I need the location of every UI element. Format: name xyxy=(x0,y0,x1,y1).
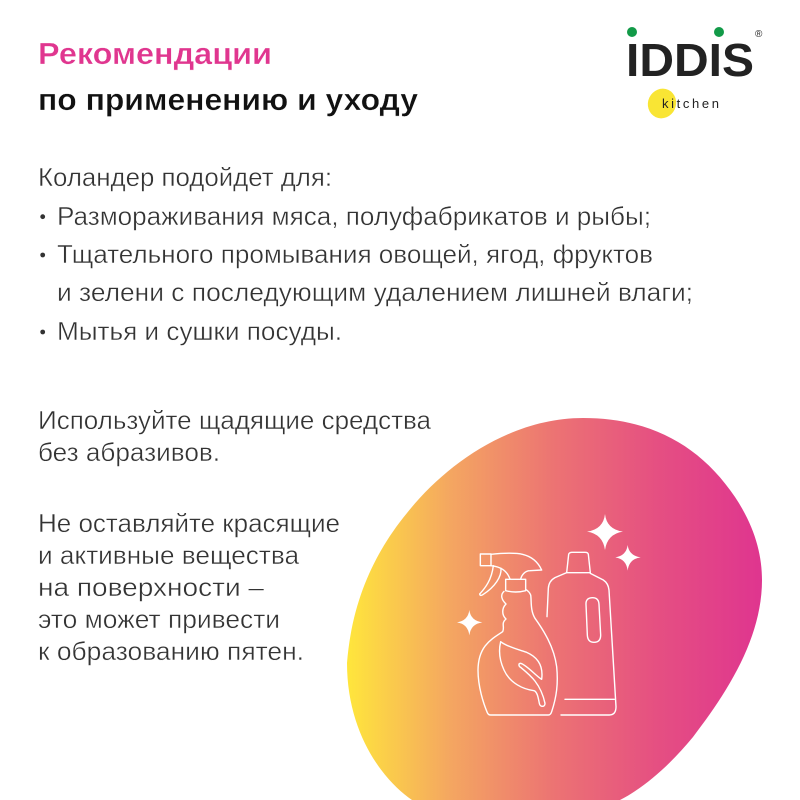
usage list: Коландер подойдет для: xyxy=(38,162,332,192)
care note: staining substances xyxy=(38,508,340,666)
logo: IDDIS kitchen: ® xyxy=(755,29,763,40)
usage list: Размораживания мяса, полуфабрикатов и рыбы; xyxy=(57,201,651,231)
care note: staining substances: это может привести xyxy=(38,604,280,634)
usage list: Тщательного промывания овощей, ягод, фруктов xyxy=(57,239,653,269)
care note: gentle products: без абразивов. xyxy=(38,437,220,467)
title: по применению и уходу xyxy=(38,82,419,117)
logo: IDDIS kitchen: kitchen xyxy=(662,96,719,111)
icon: spray bottle xyxy=(478,553,557,715)
icon: sparkles xyxy=(457,514,641,635)
care note: staining substances: и активные вещества xyxy=(38,540,300,570)
gradient blob xyxy=(347,418,762,800)
logo: IDDIS kitchen xyxy=(626,27,763,123)
care note: staining substances: Не оставляйте красящие xyxy=(38,508,340,538)
title: Рекомендации xyxy=(38,36,272,71)
usage list xyxy=(38,162,693,346)
care note: gentle products: Используйте щадящие средства xyxy=(38,405,432,435)
care note: staining substances: на поверхности – xyxy=(38,572,265,602)
care note: gentle products xyxy=(38,405,432,467)
usage list: и зелени с последующим удалением лишней влаги; xyxy=(57,277,693,307)
usage list: Мытья и сушки посуды. xyxy=(57,316,342,346)
icon: detergent bottle xyxy=(547,552,616,715)
logo: IDDIS kitchen: IDDIS xyxy=(626,34,754,86)
icon: cleaning bottles with sparkles xyxy=(457,514,641,715)
title xyxy=(38,36,419,117)
care note: staining substances: к образованию пятен. xyxy=(38,636,304,666)
